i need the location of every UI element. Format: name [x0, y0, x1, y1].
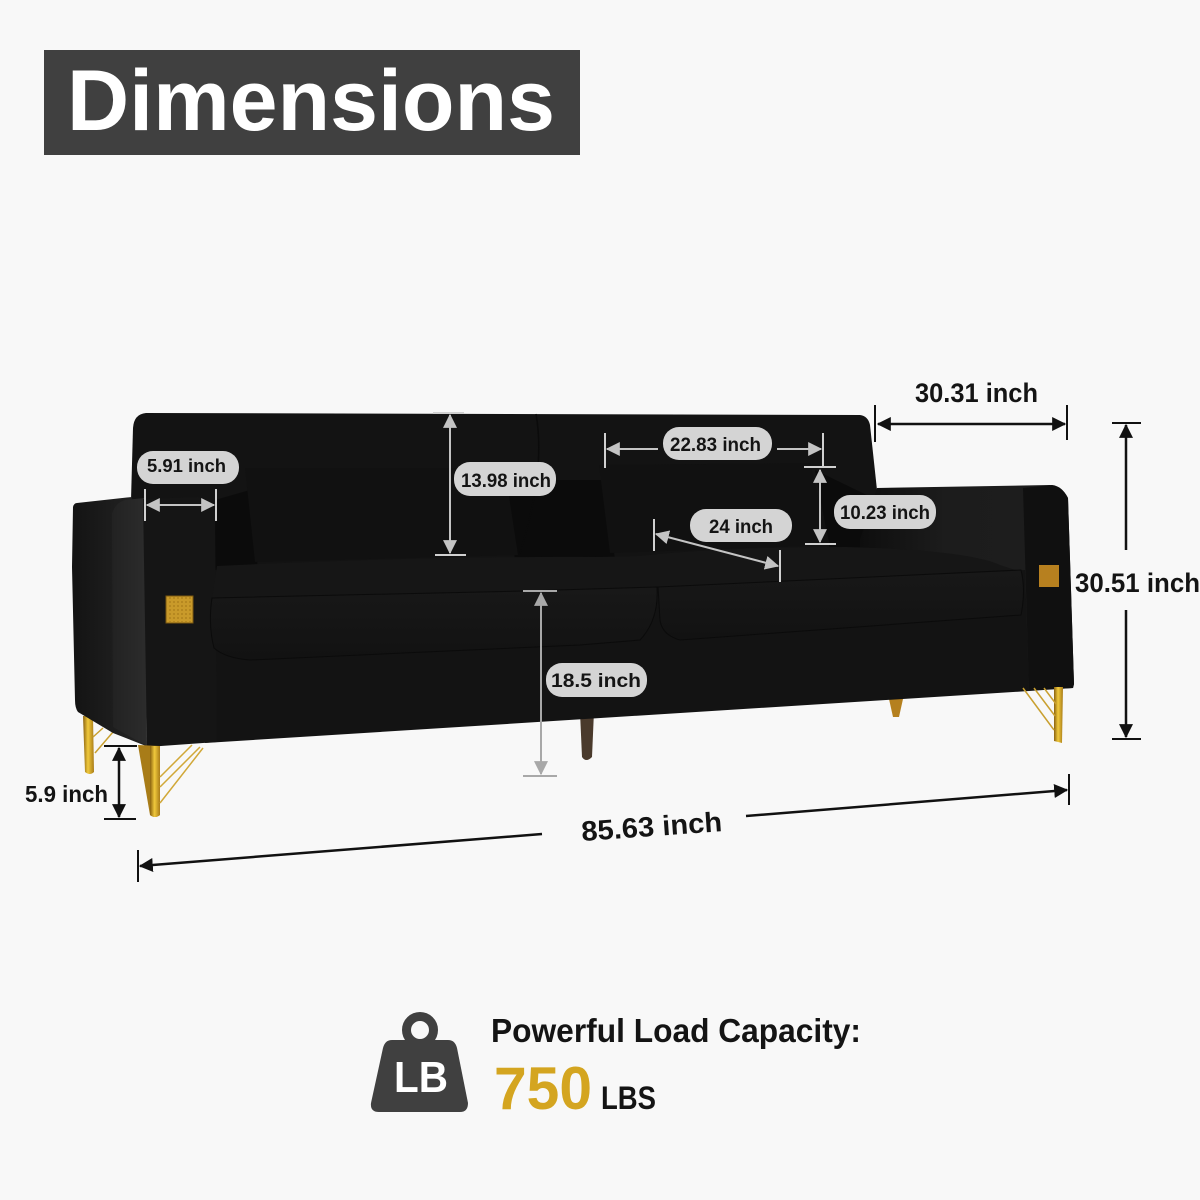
dimension: 5.91 inch armrest width — [137, 451, 239, 521]
load capacity value — [494, 1055, 656, 1122]
sofa — [72, 413, 1074, 817]
sofa: pillow right — [599, 463, 830, 553]
icon: LB weight: LB — [394, 1053, 448, 1102]
dimension: 30.31 inch depth: 30.31 inch — [915, 378, 1038, 408]
dimension: 5.9 inch leg height — [25, 746, 137, 819]
sofa: right gold tile — [1039, 565, 1059, 587]
sofa: seat top — [212, 547, 1024, 600]
sofa: shadow behind pillows — [215, 470, 877, 570]
sofa: left gold tile — [166, 596, 193, 623]
load capacity value: 750 — [494, 1055, 592, 1122]
load capacity value: LBS — [601, 1080, 656, 1116]
dimension: 22.83 inch pillow width: 22.83 inch — [670, 435, 761, 456]
dimension: 5.91 inch armrest width: 5.91 inch — [147, 456, 226, 476]
dimension: 13.98 inch back height — [433, 413, 556, 555]
sofa: left arm front — [143, 497, 217, 747]
dimension: 24 inch seat depth — [654, 509, 792, 582]
sofa: right seat cushion — [658, 570, 1024, 640]
sofa: left armrest outer side — [72, 497, 146, 746]
dimension: 5.9 inch leg height: 5.9 inch — [25, 781, 108, 807]
sofa: pillow left — [245, 468, 518, 562]
dimension: 85.63 inch total width — [138, 774, 1069, 882]
dimension: 18.5 inch seat height — [523, 591, 647, 776]
dimension: 24 inch seat depth: 24 inch — [709, 517, 773, 538]
sofa: right arm front — [1023, 485, 1074, 691]
sofa: front right leg — [1023, 687, 1063, 743]
dimension: 18.5 inch seat height: 18.5 inch — [551, 671, 641, 692]
dimension: 85.63 inch total width: 85.63 inch — [580, 806, 723, 847]
dimension: 13.98 inch back height: 13.98 inch — [461, 471, 551, 492]
sofa: backrest — [131, 413, 877, 600]
load capacity heading: Powerful Load Capacity: — [491, 1012, 861, 1049]
dimension: 10.23 inch pillow height — [804, 467, 936, 544]
sofa: far legs — [83, 690, 905, 774]
dimension: 22.83 inch pillow width — [605, 427, 823, 468]
dimension: 10.23 inch pillow height: 10.23 inch — [840, 503, 930, 524]
sofa: left arm outer highlight — [112, 498, 147, 746]
sofa: front left leg — [138, 745, 203, 817]
dimension: 30.31 inch depth — [875, 378, 1067, 442]
sofa: right armrest — [860, 485, 1074, 700]
sofa: left seat cushion — [210, 587, 657, 660]
title: Dimensions — [67, 53, 555, 149]
dimension: 30.51 inch total height — [1075, 423, 1200, 739]
sofa: base — [205, 570, 1029, 743]
icon: LB weight — [371, 1016, 468, 1112]
sofa: back center seam — [520, 414, 539, 553]
